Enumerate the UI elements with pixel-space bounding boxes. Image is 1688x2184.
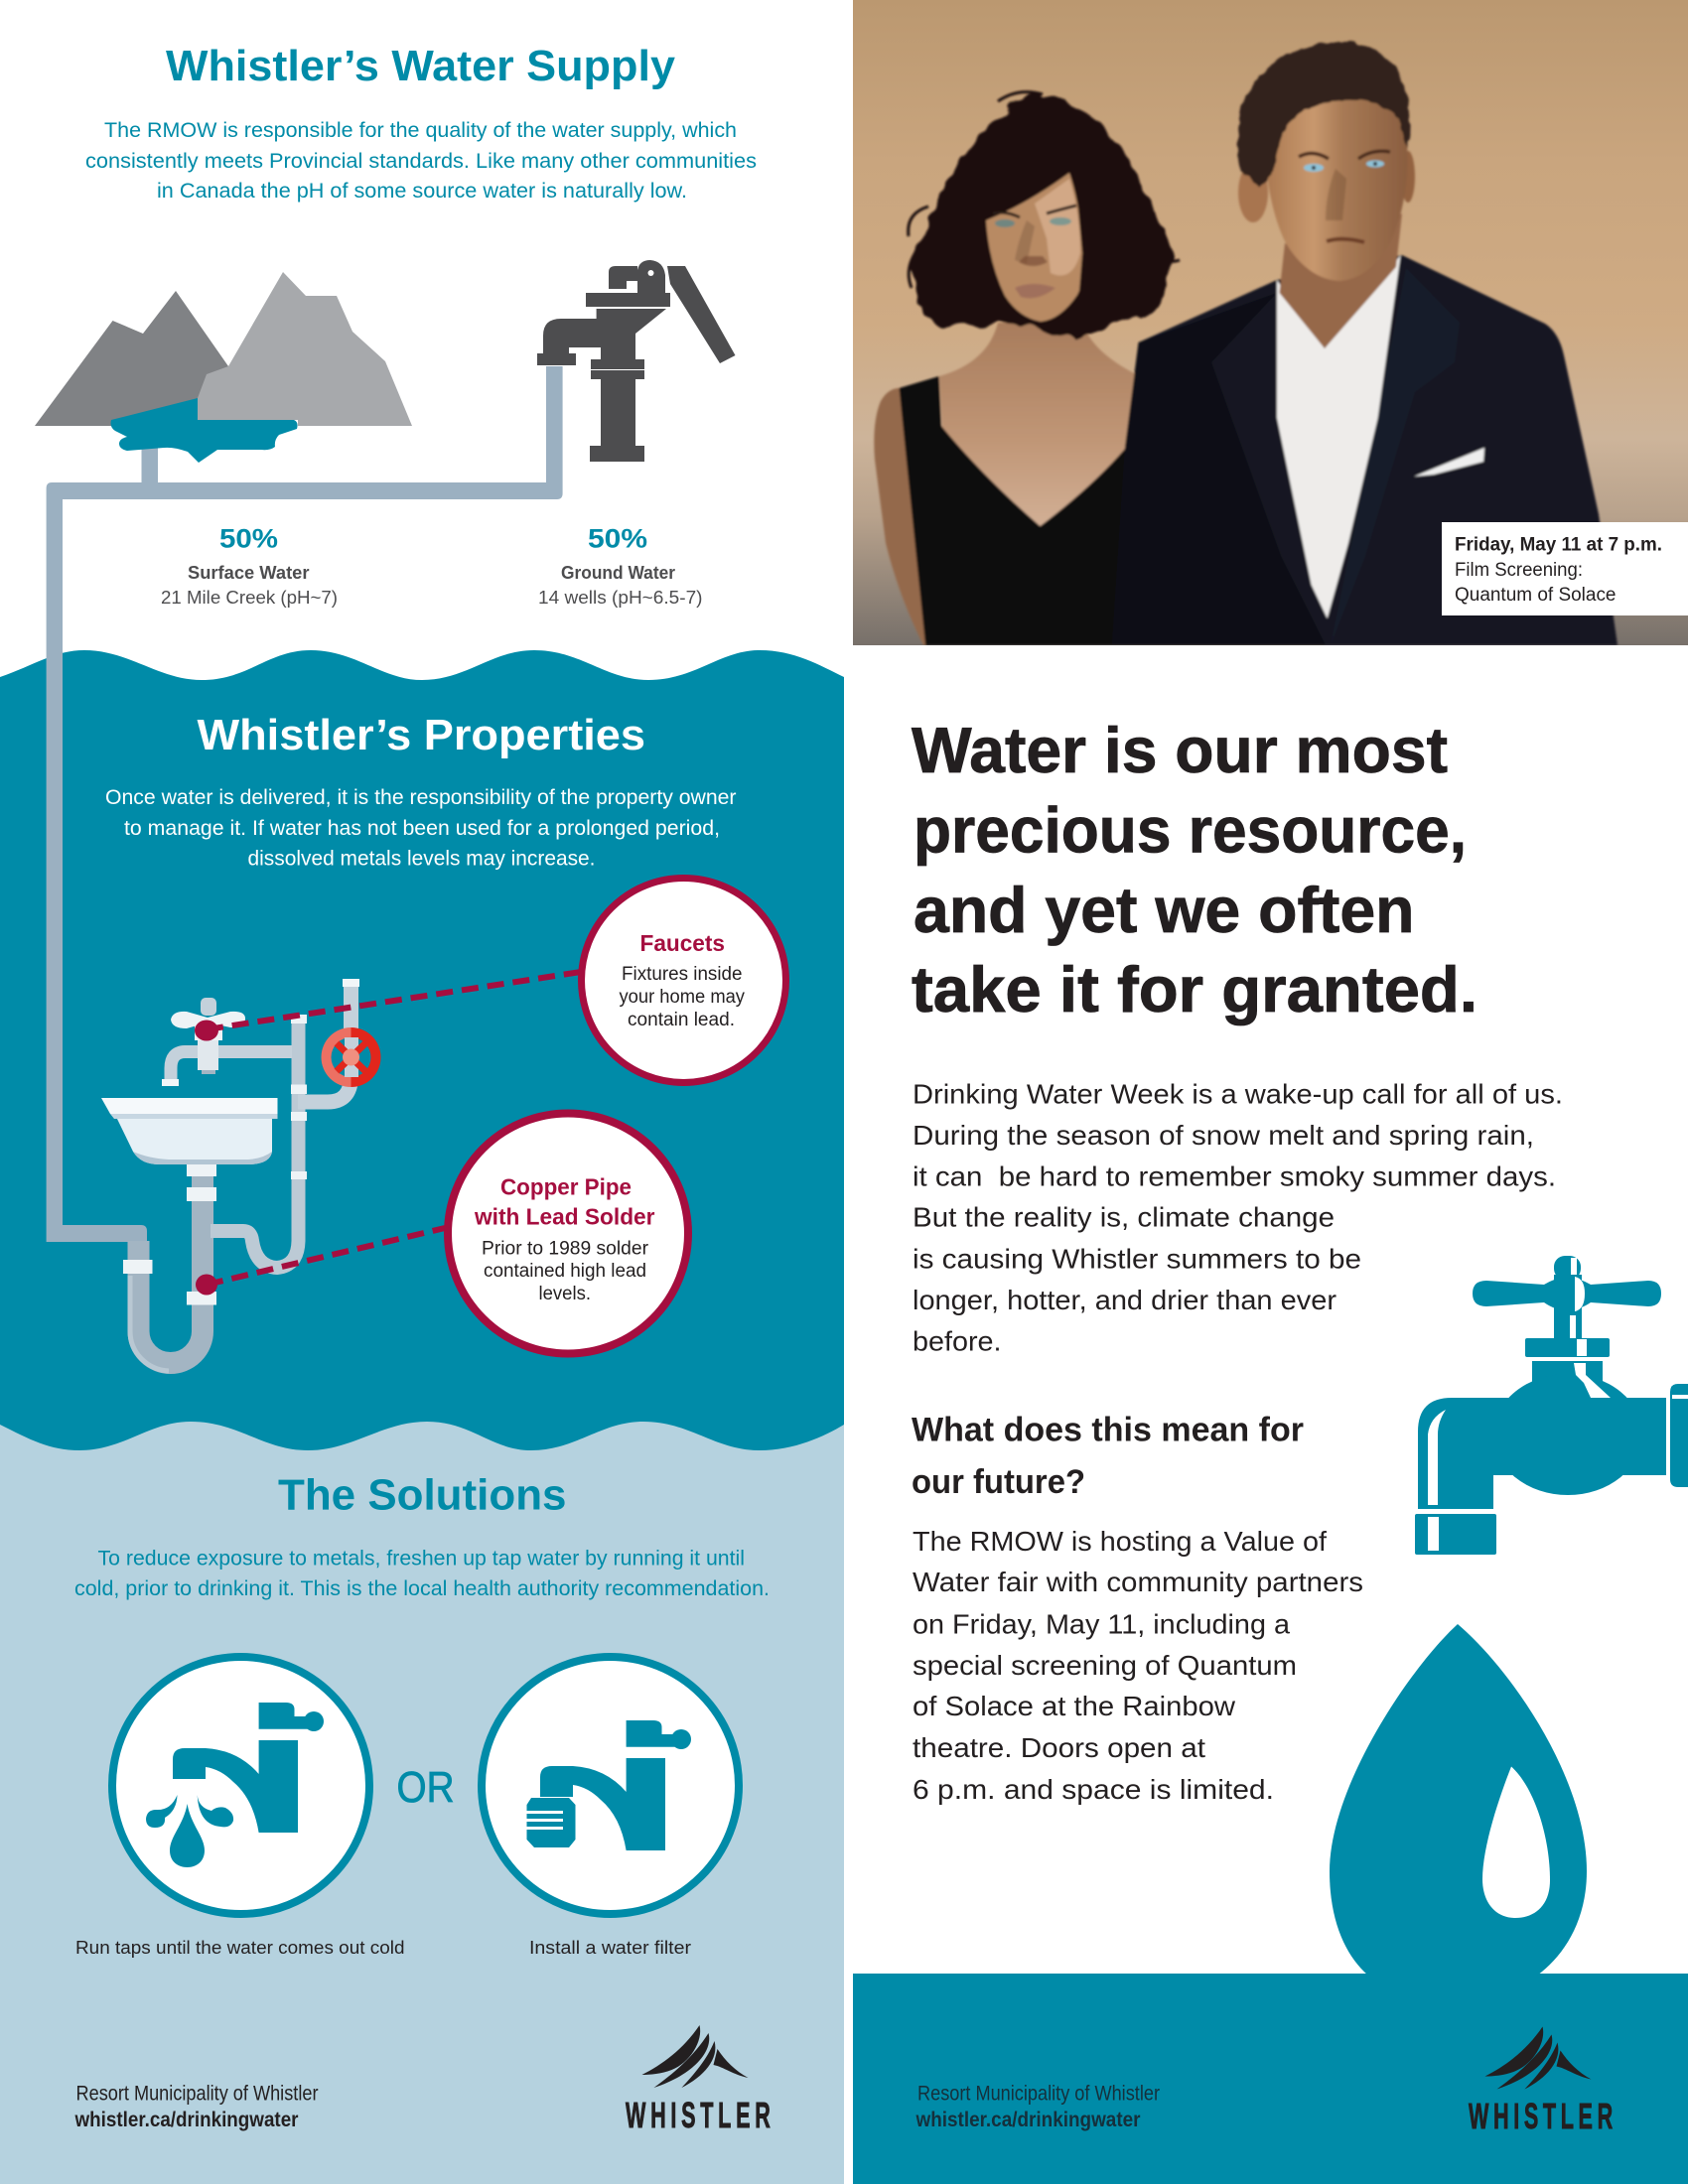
text block: value of water fair: special screening of Quantum: [913, 1650, 1297, 1681]
woman chest: [937, 320, 1136, 528]
text block: drinking water week: During the season of snow melt and spring rain,: [913, 1120, 1534, 1151]
woman hair: [913, 95, 1172, 341]
text block: drinking water week: before.: [913, 1326, 1001, 1356]
caption box: film screening: Quantum of Solace: [1455, 585, 1617, 606]
couplings: [123, 1015, 307, 1304]
icon: hand water pump: [537, 260, 735, 462]
icon: run taps circle: [112, 1657, 369, 1914]
faucet handle: [171, 998, 245, 1040]
stat: ground water: 14 wells (pH~6.5-7): [538, 588, 703, 608]
text block: water supply intro: [85, 119, 757, 203]
text block: properties intro: [105, 786, 737, 870]
callout: Copper Pipe with Lead Solder: [448, 1114, 688, 1354]
stat: surface water: 50%: [219, 524, 278, 554]
woman dress: [900, 376, 1162, 645]
panel: properties teal background with wave: [0, 650, 844, 1469]
text block: properties intro: to manage it. If water has not been used for a prolonged period,: [124, 817, 720, 840]
text block: value of water fair: 6 p.m. and space is limited.: [913, 1774, 1274, 1805]
text block: value of water fair: The RMOW is hosting a Value of: [913, 1526, 1327, 1557]
callout: Copper Pipe with Lead Solder: Copper Pipe: [500, 1173, 632, 1199]
text block: properties intro: dissolved metals levels may increase.: [248, 848, 596, 870]
text block: drinking water week: But the reality is, climate change: [913, 1201, 1335, 1233]
stat: surface water: 21 Mile Creek (pH~7): [161, 588, 338, 608]
text block: value of water fair: of Solace at the Rainbow: [913, 1691, 1235, 1721]
caption box: film screening: [1442, 522, 1688, 615]
title: Whistler's Water Supply: Whistler’s Water Supply: [166, 42, 676, 90]
callout: Faucets: Fixtures inside: [622, 964, 743, 985]
woman face: [986, 173, 1084, 322]
text block: solutions intro: [74, 1547, 770, 1600]
text block: drinking water week: it can be hard to remember smoky summer days.: [913, 1161, 1556, 1191]
logo: Whistler left: WHISTLER: [626, 2096, 771, 2135]
man shirt: [1277, 255, 1401, 618]
logo: Whistler right: WHISTLER: [1469, 2097, 1613, 2136]
text block: solutions intro: cold, prior to drinking it. This is the local health authority recommendation.: [74, 1577, 770, 1600]
callout line: copper pipe: [196, 1228, 445, 1295]
trap pipe: [139, 1163, 203, 1363]
text block: water supply intro: consistently meets Provincial standards. Like many other communities: [85, 150, 757, 173]
text block: value of water fair: theatre. Doors open at: [913, 1732, 1205, 1763]
headline: Water is our most precious resource: Water is our most: [912, 714, 1448, 786]
panel: solutions light background with wave: [0, 1422, 844, 2184]
pipe: water main from sources down to sink: [47, 366, 563, 1266]
text block: drinking water week: longer, hotter, and drier than ever: [913, 1285, 1336, 1315]
heading: Whistler's Properties: Whistler’s Properties: [197, 711, 645, 759]
callout: Faucets: your home may: [620, 987, 745, 1008]
text block: value of water fair: Water fair with community partners: [913, 1567, 1363, 1597]
photo: film still with two figures: [853, 0, 1688, 645]
callout: Copper Pipe with Lead Solder: with Lead Solder: [474, 1203, 655, 1229]
footer text: left: [74, 2083, 319, 2131]
illustration: sink and plumbing: [101, 979, 381, 1371]
caption: install filter: Install a water filter: [529, 1938, 691, 1958]
man face: [1263, 85, 1408, 281]
stat: ground water: [538, 524, 703, 608]
sink basin: [116, 1117, 272, 1164]
icon: water filter circle: [482, 1657, 739, 1914]
man features: [1304, 164, 1324, 172]
text block: properties intro: Once water is delivered, it is the responsibility of the property owner: [105, 786, 737, 809]
text block: drinking water week: is causing Whistler summers to be: [913, 1243, 1361, 1275]
valve: [322, 1027, 381, 1087]
text block: value of water fair: [913, 1526, 1363, 1805]
headline: Water is our most precious resource: precious resource,: [914, 794, 1467, 866]
man suit: [1112, 255, 1618, 645]
callout: Faucets: [582, 878, 786, 1082]
caption box: film screening: Friday, May 11 at 7 p.m.: [1455, 534, 1662, 556]
caption: run taps: Run taps until the water comes out cold: [75, 1938, 405, 1958]
stat: surface water: Surface Water: [188, 563, 310, 583]
footer text: right: [915, 2083, 1160, 2131]
caption box: film screening: Film Screening:: [1455, 560, 1583, 581]
stat: surface water: [161, 524, 338, 608]
heading: The Solutions: The Solutions: [278, 1471, 566, 1519]
stat: ground water: Ground Water: [561, 563, 675, 583]
callout: Copper Pipe with Lead Solder: Prior to 1989 solder: [482, 1239, 649, 1259]
faucet supply pipe: [171, 1052, 292, 1082]
icon: mountains and lake: [35, 272, 412, 463]
pocket square: [1414, 448, 1484, 477]
man hair: [1237, 42, 1410, 187]
headline: Water is our most precious resource: take it for granted.: [912, 953, 1477, 1025]
stat: ground water: 50%: [588, 524, 647, 554]
footer text: right: whistler.ca/drinkingwater: [915, 2109, 1140, 2131]
text block: water supply intro: The RMOW is responsible for the quality of the water supply, which: [104, 119, 737, 142]
headline: Water is our most precious resource: and yet we often: [914, 874, 1414, 946]
text block: value of water fair: on Friday, May 11, including a: [913, 1608, 1291, 1640]
icon: large faucet: [1415, 1256, 1688, 1555]
man neck: [1279, 213, 1402, 348]
callout: Copper Pipe with Lead Solder: contained high lead: [484, 1261, 646, 1282]
woman arm: [873, 387, 927, 645]
footer text: left: whistler.ca/drinkingwater: [74, 2109, 299, 2131]
text block: drinking water week: [913, 1078, 1563, 1356]
woman features: [995, 219, 1015, 227]
second trap pipe: [211, 1022, 298, 1268]
headline: Water is our most precious resource: [912, 714, 1477, 1025]
subheading: what does this mean: What does this mean for: [912, 1412, 1304, 1449]
callout: Faucets: contain lead.: [628, 1010, 735, 1030]
logo: Whistler right: [1469, 2027, 1613, 2136]
text block: water supply intro: in Canada the pH of some source water is naturally low.: [157, 180, 687, 203]
text block: drinking water week: Drinking Water Week is a wake-up call for all of us.: [913, 1078, 1563, 1110]
right pipe: [298, 983, 352, 1102]
callout: Faucets: Faucets: [639, 930, 725, 956]
man ears: [1238, 163, 1268, 222]
subheading: what does this mean: our future?: [912, 1463, 1085, 1501]
text block: solutions intro: To reduce exposure to metals, freshen up tap water by running it until: [97, 1547, 745, 1570]
callout: Copper Pipe with Lead Solder: levels.: [538, 1284, 591, 1304]
subheading: what does this mean: [912, 1412, 1304, 1501]
icon: large water drop: [1330, 1624, 1587, 1976]
footer text: left: Resort Municipality of Whistler: [75, 2083, 318, 2105]
text: OR: OR: [397, 1763, 455, 1812]
callout line: faucets: [195, 972, 581, 1040]
panel: right footer band: [853, 1974, 1688, 2184]
logo: Whistler left: [626, 2025, 771, 2135]
footer text: right: Resort Municipality of Whistler: [917, 2083, 1160, 2105]
